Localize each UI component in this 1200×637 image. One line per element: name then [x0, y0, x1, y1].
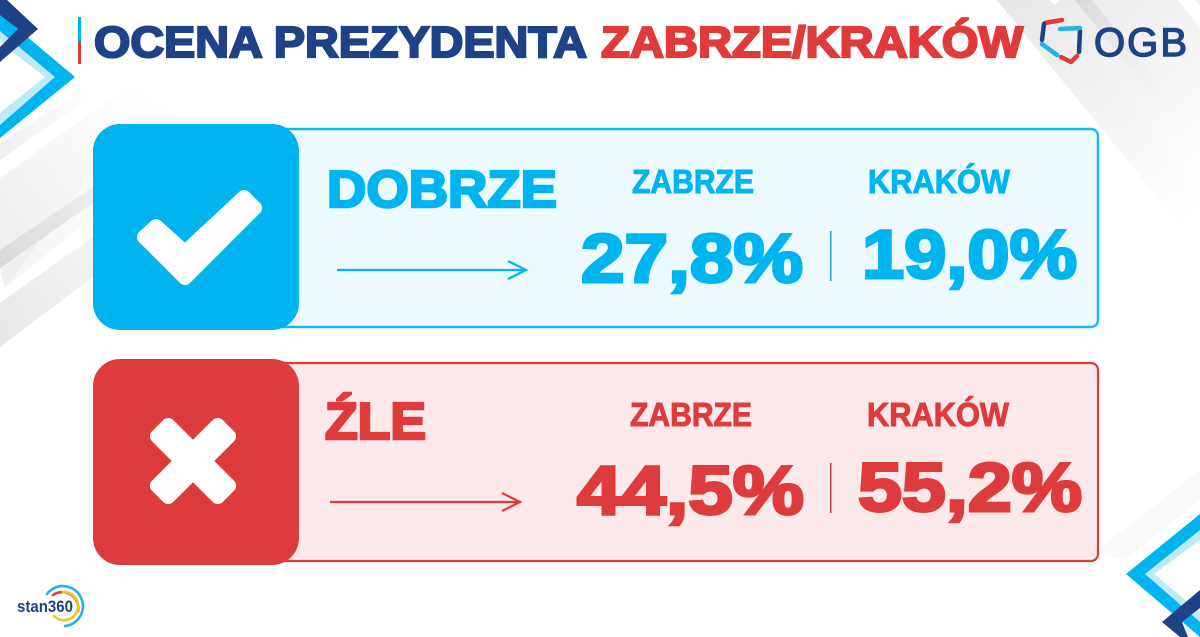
- divider: [830, 231, 832, 281]
- value: Kraków: 19,0%: [862, 216, 1077, 293]
- title: ZABRZE/KRAKÓW: [601, 17, 1023, 67]
- label: Kraków: KRAKÓW: [868, 163, 1011, 200]
- label: Kraków: KRAKÓW: [867, 396, 1010, 433]
- chevron: top left: [0, 0, 75, 138]
- logo: stan360: [17, 586, 83, 626]
- icon: check mark: [93, 124, 299, 330]
- label: Zabrze: ZABRZE: [630, 396, 752, 433]
- logo shield: [1042, 20, 1080, 62]
- value: Zabrze: 27,8%: [581, 220, 803, 297]
- label: Zabrze: ZABRZE: [632, 163, 754, 200]
- divider: [830, 463, 832, 513]
- title accent bar: [78, 17, 81, 64]
- logo: OGB: [1042, 20, 1187, 65]
- background stripes: left: [0, 83, 200, 347]
- title: [94, 17, 1023, 67]
- panel: dobrze: [93, 124, 1098, 330]
- title: OCENA PREZYDENTA: [94, 18, 587, 67]
- panel background: [270, 129, 1098, 327]
- background stripes: bottom right: [1095, 470, 1200, 560]
- background stripes: top right: [997, 0, 1200, 250]
- logo wordmark: OGB: [1094, 21, 1187, 65]
- arrow: [337, 261, 526, 279]
- logo wordmark: stan360: [17, 597, 73, 616]
- panel: źle: [93, 359, 1098, 565]
- value: Kraków: 55,2%: [858, 449, 1082, 526]
- value: Zabrze: 44,5%: [577, 452, 804, 529]
- logo arcs: [47, 586, 83, 626]
- heading: DOBRZE: [327, 161, 557, 219]
- chevron: bottom right: [1126, 514, 1200, 637]
- panel background: [270, 363, 1098, 561]
- icon: cross: [93, 359, 299, 565]
- heading: ŹLE: [325, 393, 426, 451]
- arrow: [330, 493, 520, 511]
